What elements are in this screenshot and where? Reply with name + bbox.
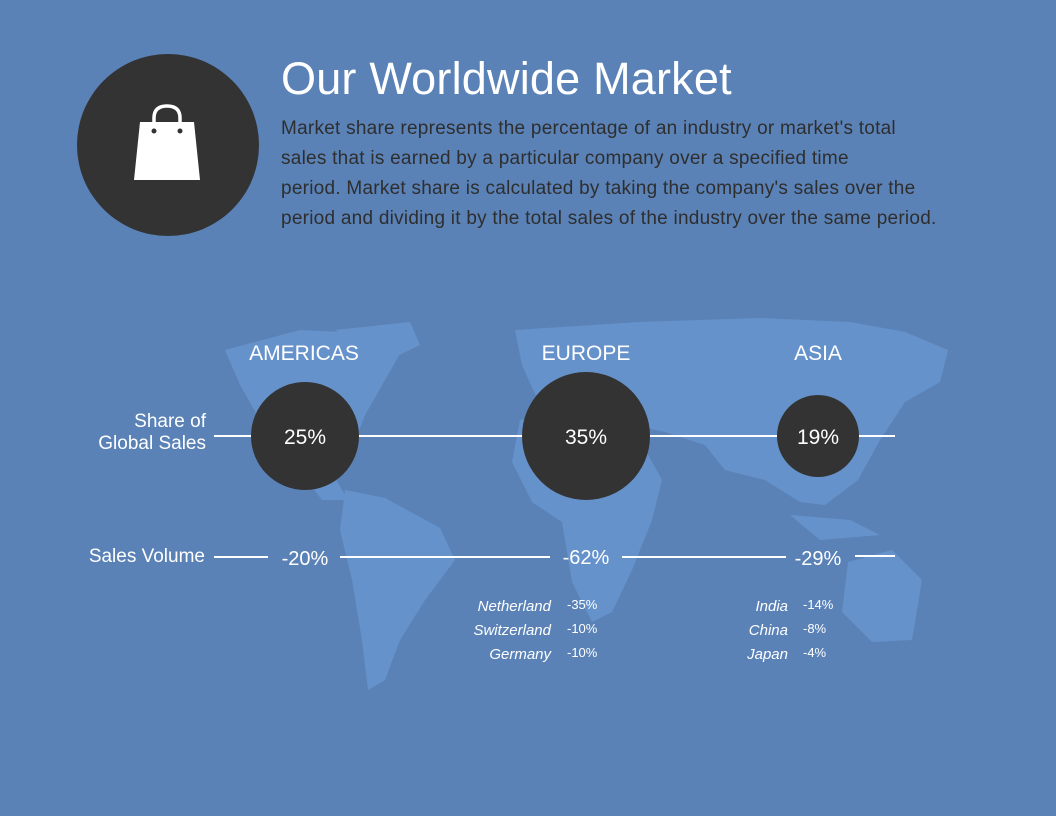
chart: region circles and lines: -35% xyxy=(567,597,598,612)
chart: region circles and lines: Global Sales xyxy=(98,433,206,454)
description text: period and dividing it by the total sales of the industry over the same period. xyxy=(281,208,937,229)
chart: region circles and lines: -14% xyxy=(803,597,834,612)
chart: region circles and lines: Germany xyxy=(489,646,552,663)
chart: region circles and lines: -8% xyxy=(803,621,827,636)
chart: region circles and lines: -10% xyxy=(567,621,598,636)
chart: region circles and lines: 25% xyxy=(284,426,326,449)
chart: region circles and lines: AMERICAS xyxy=(249,342,359,365)
description text: Market share represents the percentage of an industry or market's total xyxy=(281,118,896,139)
description text: sales that is earned by a particular company over a specified time xyxy=(281,148,849,169)
chart: region circles and lines: -10% xyxy=(567,645,598,660)
chart: region circles and lines: -29% xyxy=(795,548,842,570)
chart: region circles and lines: Japan xyxy=(746,646,788,663)
chart: region circles and lines xyxy=(89,342,895,663)
icon: shopping bag circle xyxy=(77,54,259,236)
chart: region circles and lines: -4% xyxy=(803,645,827,660)
title: Our Worldwide Market xyxy=(281,53,732,104)
chart: region circles and lines: Netherland xyxy=(478,598,552,615)
chart: region circles and lines: Sales Volume xyxy=(89,546,205,567)
chart: region circles and lines: ASIA xyxy=(794,342,842,365)
description text xyxy=(281,118,937,229)
chart: region circles and lines: India xyxy=(755,598,788,615)
chart: region circles and lines: China xyxy=(749,622,788,639)
chart: region circles and lines: -62% xyxy=(563,547,610,569)
chart: region circles and lines: Share of xyxy=(134,411,207,432)
chart: region circles and lines: -20% xyxy=(282,548,329,570)
chart: region circles and lines: EUROPE xyxy=(542,342,630,365)
description text: period. Market share is calculated by taking the company's sales over the xyxy=(281,178,915,199)
chart: region circles and lines: Switzerland xyxy=(473,622,552,639)
chart: region circles and lines: 19% xyxy=(797,426,839,449)
chart: region circles and lines: 35% xyxy=(565,426,607,449)
